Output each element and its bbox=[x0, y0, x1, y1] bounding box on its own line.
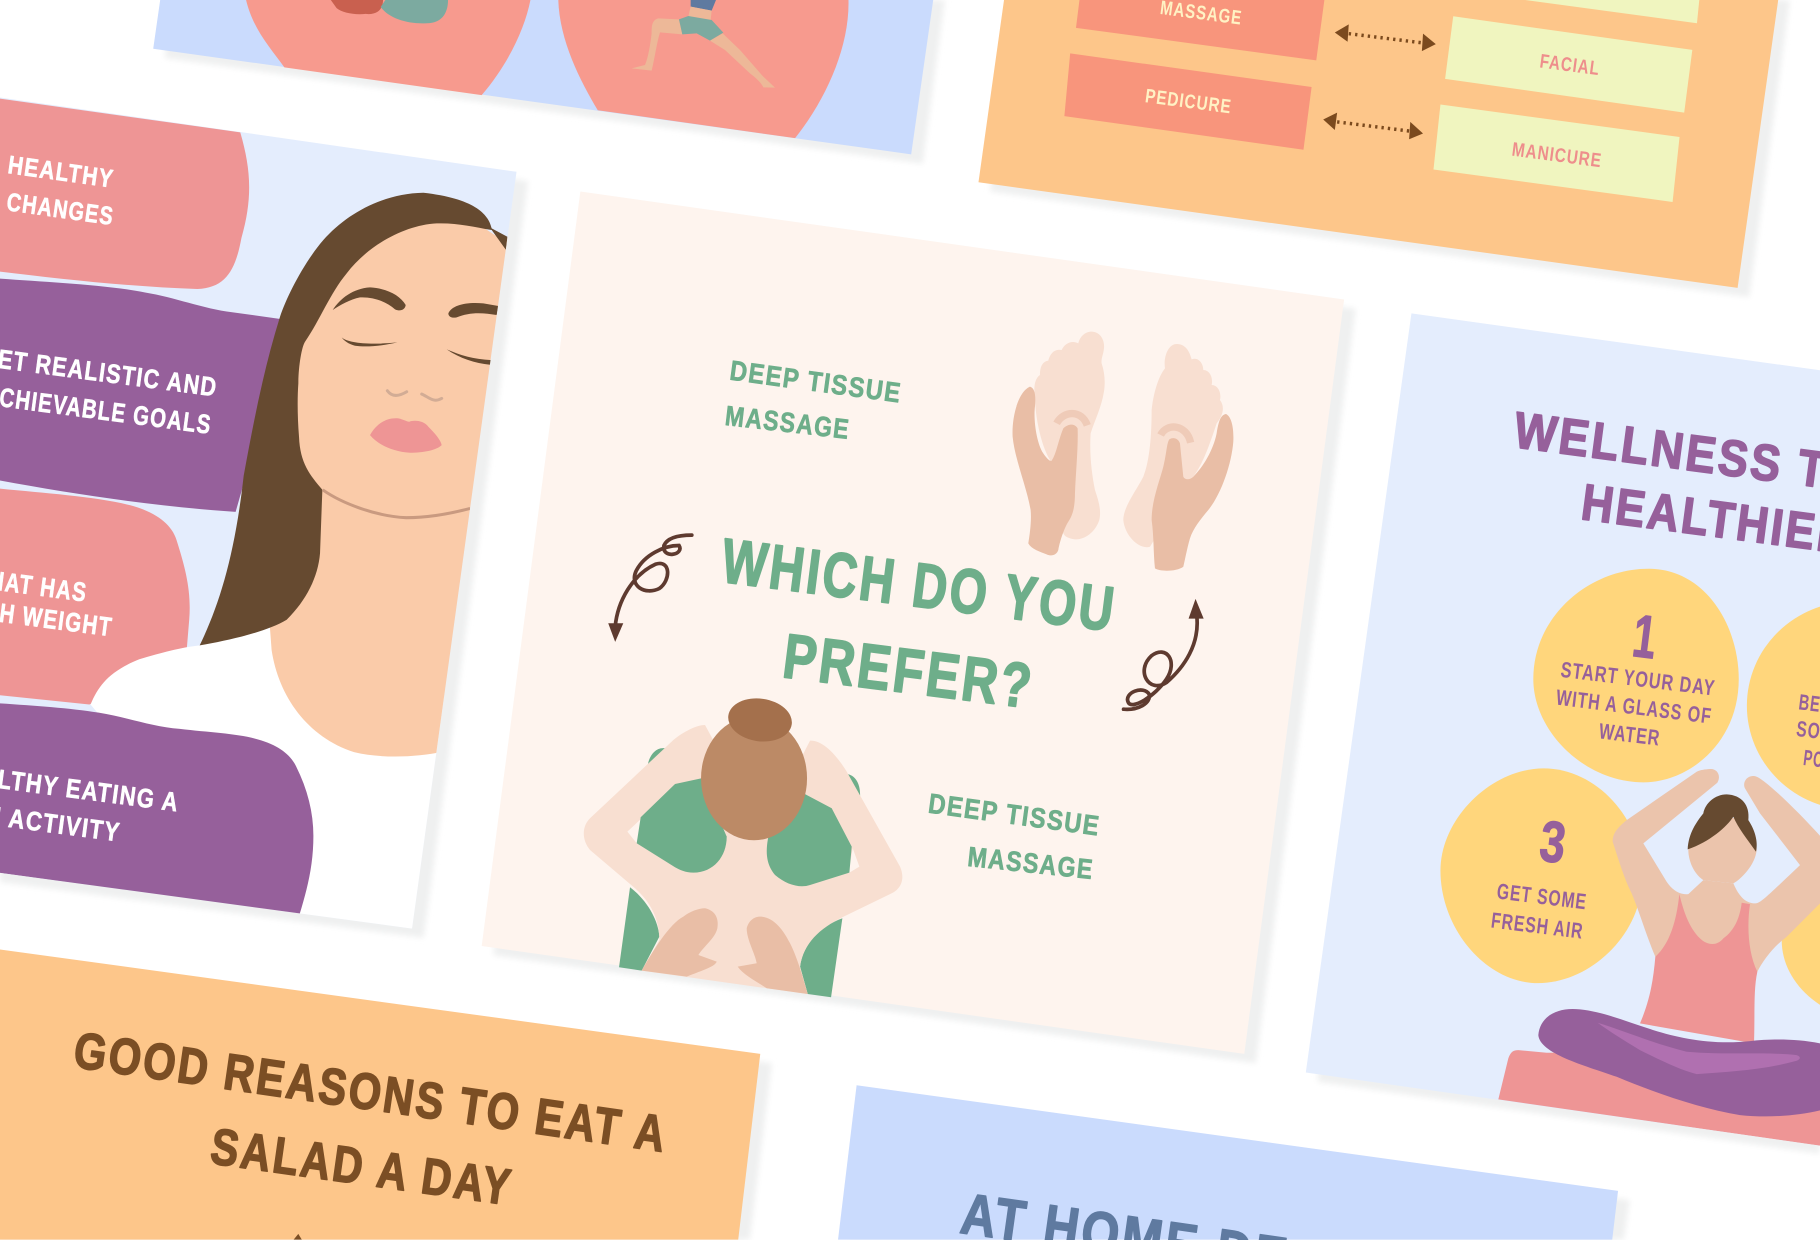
hair bbox=[200, 193, 507, 645]
left arch mark bbox=[1057, 414, 1087, 425]
hair bbox=[1688, 794, 1757, 852]
panel: centre massage preference card bbox=[482, 192, 1356, 1063]
panel: bottom blue detox card bbox=[838, 1085, 1630, 1240]
arrow: massage to facial bbox=[1335, 24, 1436, 51]
left hand bbox=[1013, 387, 1078, 555]
blob: right salmon shape bbox=[558, 0, 849, 138]
panel: right wellness tips card bbox=[1306, 313, 1820, 1154]
tip circle: 1: 1 bbox=[1629, 601, 1663, 672]
yoga mat bbox=[1498, 1050, 1820, 1153]
option: manicure: MANICURE bbox=[1511, 139, 1603, 172]
facial features and hair group bbox=[200, 193, 507, 645]
icon: cropped illustration tip bbox=[294, 1234, 302, 1240]
icon: yoga lunge figure bbox=[632, 0, 775, 88]
tip text: realistic goals bbox=[0, 342, 219, 440]
tank top bbox=[1640, 894, 1757, 1043]
heading: good reasons to eat a salad: SALAD A DAY bbox=[207, 1117, 516, 1216]
illustration: hands massaging feet bbox=[1013, 332, 1233, 571]
label: deep tissue massage top bbox=[724, 355, 904, 445]
arms and torso skin bbox=[1613, 769, 1820, 972]
icon: apple and leaf bbox=[331, 0, 448, 23]
label: deep tissue massage top: MASSAGE bbox=[724, 400, 852, 445]
title: which do you prefer bbox=[718, 526, 1120, 722]
left eyebrow bbox=[333, 287, 406, 310]
shirt bbox=[90, 628, 436, 928]
blob: pink tip one bbox=[0, 99, 249, 289]
label: deep tissue massage top: DEEP TISSUE bbox=[728, 355, 904, 409]
tip circle: 3 bbox=[1440, 768, 1642, 983]
option: manicure bbox=[1433, 104, 1680, 202]
label: deep tissue massage bottom: DEEP TISSUE bbox=[927, 788, 1102, 842]
label: deep tissue massage bottom: MASSAGE bbox=[966, 841, 1095, 885]
body and arms bbox=[584, 725, 902, 994]
option: pedicure bbox=[1064, 53, 1312, 150]
tip circle: 3: 3 bbox=[1536, 808, 1572, 876]
right massaging hand bbox=[738, 917, 808, 994]
tip circle: 2 bbox=[1747, 601, 1820, 810]
option: pedicure: PEDICURE bbox=[1144, 85, 1233, 118]
title: which do you prefer: WHICH DO YOU bbox=[718, 526, 1120, 645]
tip text: healthy changes bbox=[5, 151, 116, 231]
left shoulder towel bbox=[637, 778, 727, 873]
nose bbox=[387, 391, 442, 400]
title: which do you prefer: PREFER? bbox=[779, 621, 1038, 722]
panel: left woman wellness card bbox=[0, 98, 546, 940]
crossed legs bbox=[1538, 1009, 1820, 1116]
tip circle: 3: FRESH AIR bbox=[1490, 908, 1585, 944]
towel strips bbox=[619, 887, 842, 997]
tip circle: 1: START YOUR DAY bbox=[1559, 657, 1717, 701]
label: deep tissue massage bottom bbox=[927, 788, 1102, 885]
left closed eye bbox=[342, 337, 397, 346]
tip text: healthy eating bbox=[0, 757, 181, 848]
tip circle: 4 bbox=[1782, 904, 1820, 1005]
neck line bbox=[323, 490, 470, 518]
panel: bottom orange salad card bbox=[0, 949, 772, 1240]
tip circle: 1: WITH A GLASS OF bbox=[1555, 685, 1713, 729]
leg highlight bbox=[1598, 1023, 1800, 1074]
heading: good reasons to eat a salad: GOOD REASONS TO EAT A bbox=[70, 1021, 671, 1163]
tip circle: 3: GET SOME bbox=[1496, 879, 1588, 914]
option: top cropped box bbox=[1525, 0, 1699, 23]
tip text: healthy changes: CHANGES bbox=[5, 188, 116, 231]
right foot bbox=[1123, 344, 1223, 547]
left massaging hand bbox=[642, 908, 718, 977]
panel: top blue food and exercise card bbox=[153, 0, 945, 164]
towel corners behind arms bbox=[647, 748, 860, 797]
right shoulder towel bbox=[767, 793, 852, 886]
blob: purple tip two bbox=[0, 279, 290, 512]
tip circle: 1 bbox=[1533, 569, 1739, 782]
hair bun bbox=[725, 694, 795, 746]
right eyebrow bbox=[448, 303, 498, 318]
face bbox=[1688, 817, 1757, 883]
tip text: weight bbox=[0, 562, 114, 642]
panel: top orange spa comparison card bbox=[978, 0, 1790, 297]
icon: left curly arrow bbox=[608, 535, 692, 642]
illustration: meditating woman on mat bbox=[1498, 769, 1820, 1153]
illustration: woman with closed eyes bbox=[91, 193, 546, 940]
illustration: back massage from above bbox=[584, 694, 902, 997]
right arch mark bbox=[1161, 427, 1191, 443]
blob: pink tip three bbox=[0, 489, 190, 705]
lips bbox=[370, 418, 442, 453]
skin bbox=[270, 223, 508, 756]
blob: left salmon shape bbox=[246, 0, 530, 95]
gaps between arms and towel bbox=[627, 818, 859, 873]
option: facial bbox=[1445, 16, 1692, 113]
tip circle: 1: WATER bbox=[1598, 718, 1662, 751]
blob: purple tip four bbox=[0, 703, 313, 915]
left foot bbox=[1034, 332, 1105, 539]
arrow: pedicure to manicure bbox=[1323, 113, 1423, 139]
tip text: healthy changes: HEALTHY bbox=[6, 151, 116, 194]
head bbox=[701, 716, 807, 840]
option: facial: FACIAL bbox=[1538, 50, 1601, 80]
option: massage bbox=[1076, 0, 1324, 60]
icon: right curly arrow bbox=[1124, 599, 1204, 709]
right closed eye bbox=[447, 349, 492, 365]
right hand bbox=[1152, 414, 1233, 571]
heading: good reasons to eat a salad bbox=[70, 1021, 671, 1216]
